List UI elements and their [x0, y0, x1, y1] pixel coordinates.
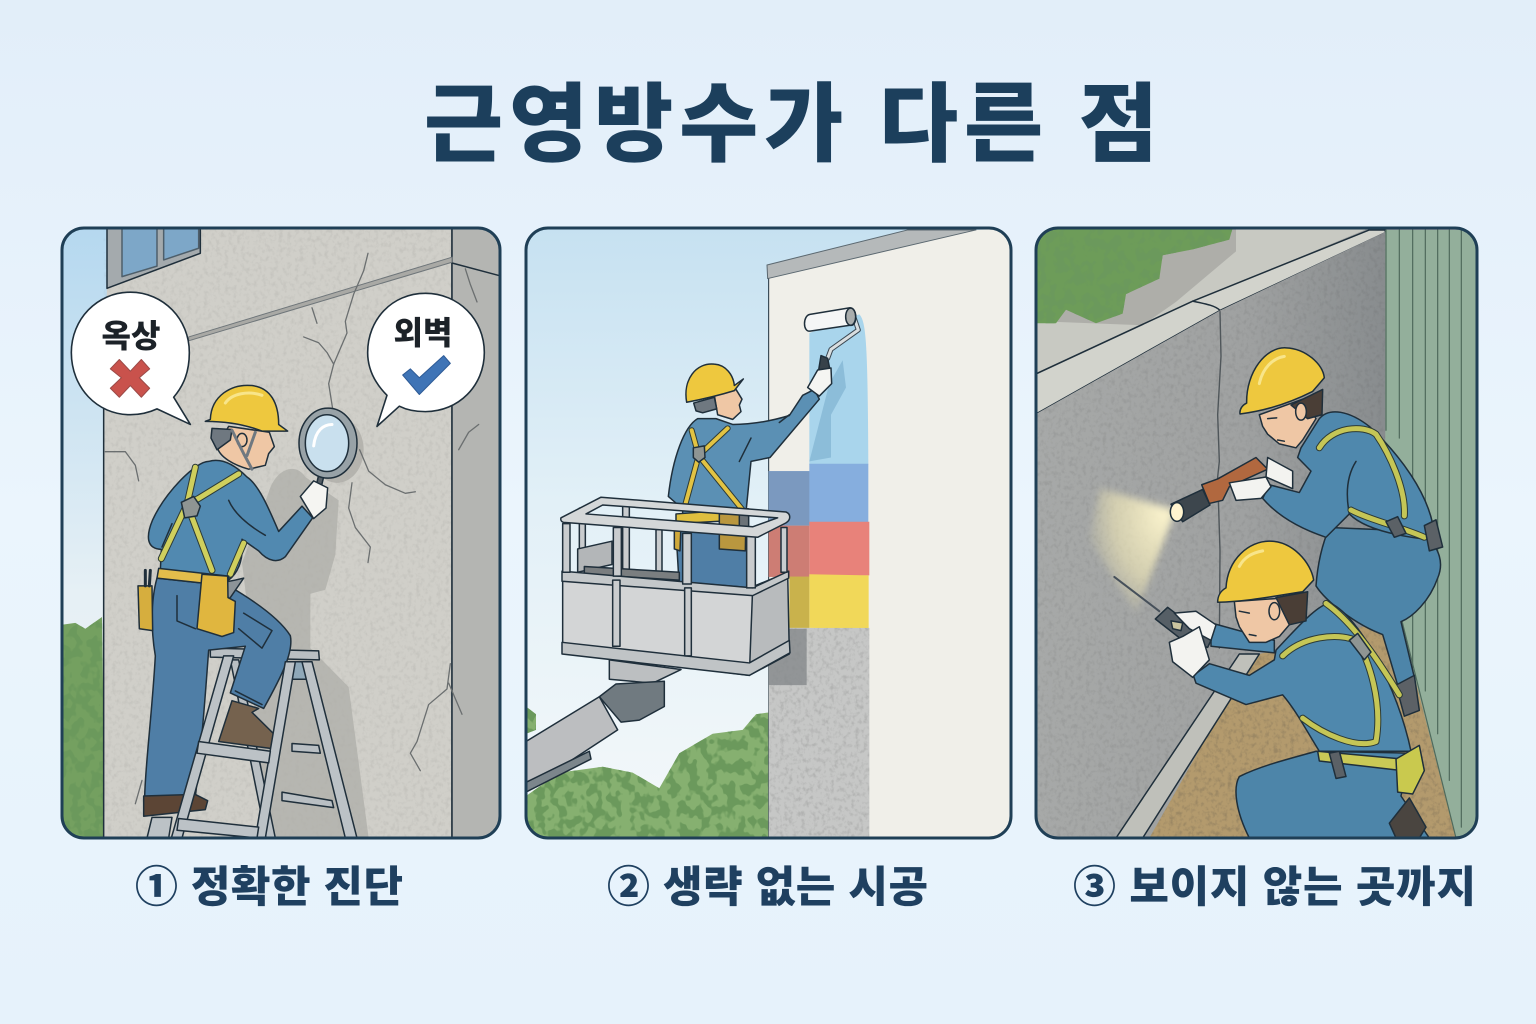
hard hat	[205, 385, 288, 431]
head	[714, 389, 742, 419]
boom lift	[526, 660, 681, 792]
worker: torso and raised arm	[668, 389, 819, 518]
upper worker	[1170, 348, 1443, 716]
roof trim	[767, 230, 976, 279]
safety harness	[161, 467, 244, 574]
ladder front	[147, 656, 357, 838]
head	[217, 426, 274, 469]
caption 3: ③ 보이지 않는 곳까지	[1073, 864, 1476, 912]
paint roller	[804, 308, 858, 370]
lower harness	[1283, 603, 1399, 744]
upper head	[1259, 399, 1316, 448]
magnifier	[316, 476, 324, 484]
coping	[1036, 230, 1385, 414]
paint layers	[769, 314, 869, 838]
upper harness	[1319, 429, 1424, 537]
lower worker torso	[1193, 603, 1411, 751]
ground	[1149, 617, 1456, 838]
panel: no skipped steps	[526, 228, 1012, 838]
panel frame 2	[526, 228, 1011, 838]
wall cracks	[105, 253, 479, 804]
caption 2: ② 생략 없는 시공	[607, 864, 928, 912]
lower worker	[1114, 541, 1429, 838]
concrete wall	[104, 228, 452, 838]
hard hat	[686, 364, 743, 402]
green cladding	[1385, 230, 1478, 838]
moisture probe	[1114, 577, 1159, 611]
icon: red cross	[110, 359, 150, 397]
speech bubble: exterior wall	[368, 293, 484, 426]
flashlight beam	[1089, 489, 1176, 613]
glove	[300, 481, 328, 519]
vertical crack	[1218, 312, 1221, 648]
lower head	[1234, 598, 1296, 642]
upper helmet	[1240, 348, 1324, 414]
lower helmet	[1218, 541, 1314, 602]
worker legs	[145, 578, 291, 797]
worker: legs behind basket	[676, 532, 746, 586]
caption 1: ① 정확한 진단	[135, 864, 403, 912]
basket top rail	[561, 497, 790, 537]
curb	[1116, 654, 1259, 838]
far arm	[1211, 623, 1274, 653]
boots	[219, 701, 274, 749]
panel: hidden places	[1036, 228, 1478, 838]
building wall	[769, 228, 1012, 838]
icon: blue check	[403, 356, 450, 395]
wall	[1036, 232, 1385, 838]
label: rooftop: 옥상	[102, 318, 160, 354]
belt and tool pouches	[157, 568, 229, 586]
trees	[526, 707, 769, 838]
upper worker torso	[1263, 412, 1433, 539]
aerial basket	[562, 506, 790, 675]
panel frame 3	[1036, 228, 1477, 838]
speech bubble: rooftop	[71, 292, 190, 424]
label: exterior wall: 외벽	[394, 315, 452, 351]
ladder rear parts	[210, 648, 334, 838]
glove	[808, 368, 832, 396]
title: 근영방수가 다른 점	[424, 77, 1158, 173]
panel: accurate diagnosis	[62, 228, 502, 838]
panel frame 1	[62, 228, 500, 838]
harness	[684, 428, 743, 510]
trees behind wall	[62, 617, 105, 838]
upper gloves	[1266, 458, 1293, 489]
lower worker legs	[1236, 751, 1429, 838]
ledge line	[189, 257, 452, 341]
roof ground	[1036, 228, 1369, 374]
upper worker legs	[1316, 528, 1441, 685]
wall shadow of worker	[242, 469, 369, 838]
bushes	[1036, 228, 1233, 323]
lower gloves	[1174, 611, 1216, 640]
window	[107, 228, 200, 288]
flashlight	[1171, 489, 1210, 522]
torso and arm	[148, 460, 313, 580]
side wall	[452, 228, 502, 838]
